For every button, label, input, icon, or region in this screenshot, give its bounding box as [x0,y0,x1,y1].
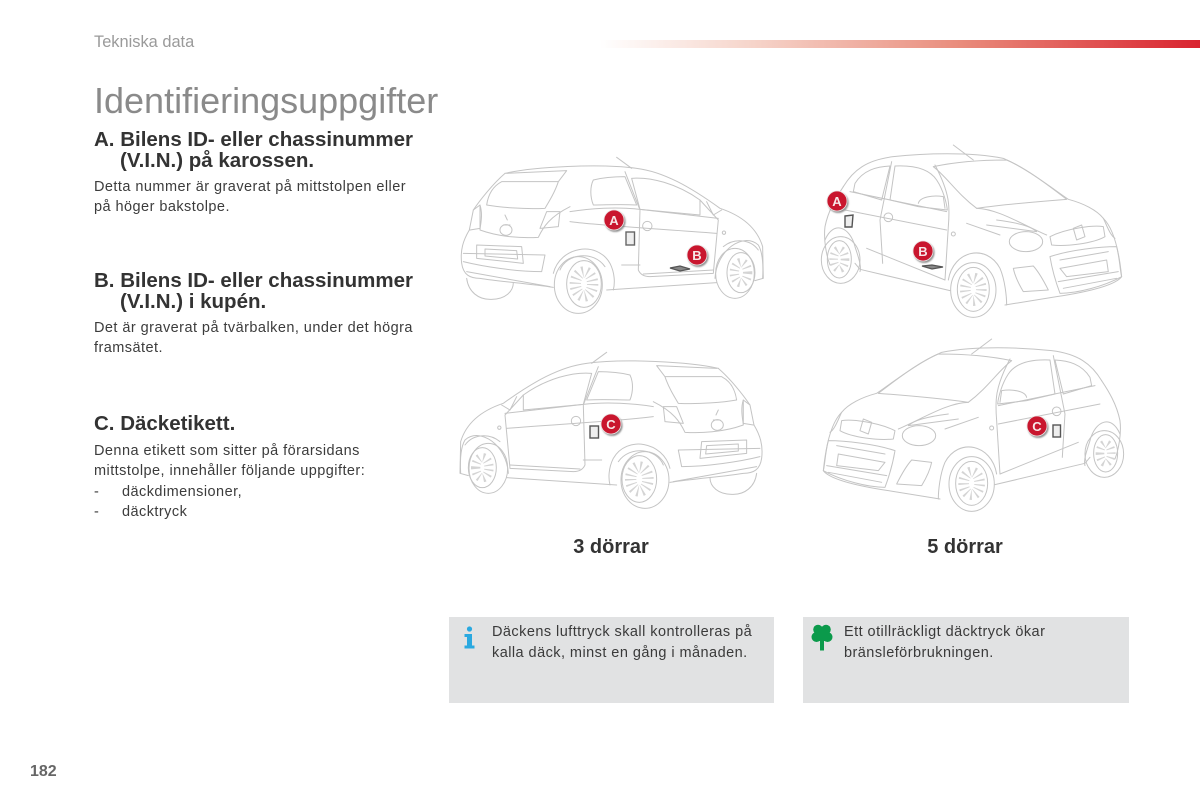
label plate C [1053,425,1060,437]
title: Identifieringsuppgifter [94,80,438,121]
panel: tyre pressure info [449,617,774,703]
text block: section B [94,320,413,356]
info text: Däckens lufttryck skall kontrolleras på [492,624,752,640]
icon: green tree [812,624,832,650]
label plate C [590,426,598,438]
marker C: C [1032,419,1042,434]
heading: section A: (V.I.N.) på karossen. [120,149,314,172]
label plate A [626,232,634,245]
text block: section C: - [94,484,99,500]
text block: section C: mittstolpe, innehåller följande uppgifter: [94,463,365,479]
heading: section B: B. Bilens ID- eller chassinummer [94,269,413,292]
info text [492,624,752,661]
marker A [604,210,624,230]
marker B [913,241,933,261]
marker B: B [918,244,928,259]
car: 5 doors, front right view with marker C [823,339,1124,511]
text block: section A: Detta nummer är graverat på mittstolpen eller [94,179,406,195]
heading: section B: (V.I.N.) i kupén. [120,290,266,313]
car: 5 doors, front left view with markers A and B [821,145,1122,317]
text block: section C: - [94,504,99,520]
text block: section C [94,443,365,520]
text block: section B: Det är graverat på tvärbalken, under det högra [94,320,413,336]
heading: section A [94,128,413,172]
marker C [601,414,621,434]
heading: section B [94,269,413,313]
page number: 182 [30,763,57,780]
running header: Tekniska data [94,33,194,51]
eco text: Ett otillräckligt däcktryck ökar [844,624,1045,640]
eco text: bränsleförbrukningen. [844,645,994,661]
text block: section C: Denna etikett som sitter på förarsidans [94,443,360,459]
marker A: A [832,194,842,209]
plate B [922,265,943,269]
car: 3 doors, rear left view with marker C [460,352,762,508]
marker C: C [606,417,616,432]
heading: section A: A. Bilens ID- eller chassinummer [94,128,413,151]
marker A: A [609,213,619,228]
marker B: B [692,248,702,263]
label plate A [845,215,853,227]
text block: section B: framsätet. [94,340,163,356]
header gradient bar [600,40,1200,48]
info text: kalla däck, minst en gång i månaden. [492,645,748,661]
eco text [844,624,1045,661]
text block: section A: på höger bakstolpe. [94,199,230,215]
panel: fuel consumption eco tip [803,617,1129,703]
plate B [670,266,690,271]
marker B [687,245,707,265]
caption: 3 doors: 3 dörrar [573,536,649,558]
marker C [1027,416,1047,436]
heading: section C: C. Däcketikett. [94,412,235,435]
car: 3 doors, rear right view with markers A and B [461,157,763,313]
caption: 5 doors: 5 dörrar [927,536,1003,558]
text block: section A [94,179,406,215]
text block: section C: däcktryck [122,504,187,520]
marker A [827,191,847,211]
icon: info [464,626,474,648]
text block: section C: däckdimensioner, [122,484,242,500]
